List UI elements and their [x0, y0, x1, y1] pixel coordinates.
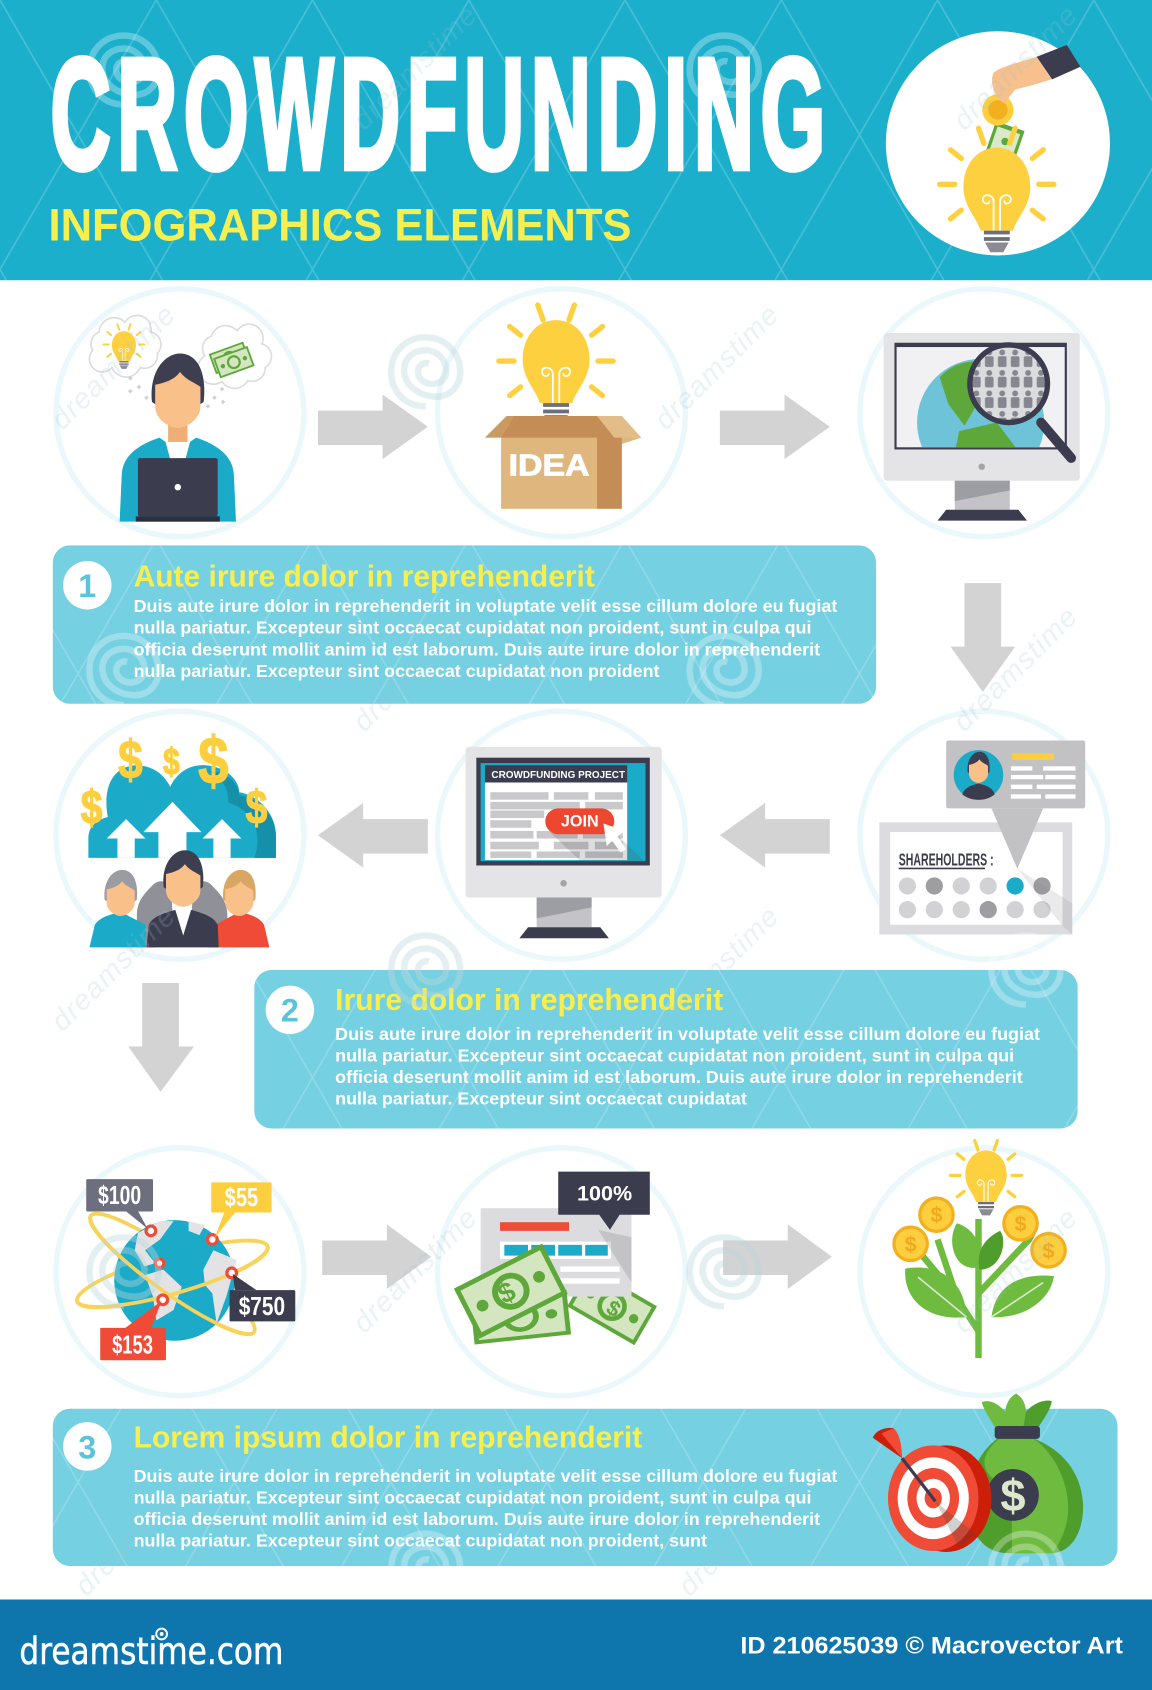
- panel: step 2: [254, 970, 1078, 1128]
- heading 2: Irure dolor in reprehenderit: [335, 984, 723, 1017]
- panel: step 1: [53, 545, 876, 704]
- panel: step 3: [53, 1409, 1118, 1566]
- icon: money plant with bulb: [894, 1141, 1065, 1358]
- icon: globe with price tags: $100: [98, 1182, 141, 1210]
- body text 3: nulla pariatur. Excepteur sint occaecat cupidatat non proident, sunt: [134, 1531, 707, 1551]
- arrow: [720, 394, 830, 459]
- body text 2: officia deserunt mollit anim id est laborum. Duis aute irure dolor in reprehenderit: [335, 1067, 1023, 1087]
- body text 2: Duis aute irure dolor in reprehenderit in voluptate velit esse cillum dolore eu fugiat: [335, 1024, 1040, 1044]
- number badge 1: [63, 561, 112, 609]
- icon: monitor with project page: JOIN: [561, 813, 599, 831]
- icon: money bag and target: $: [1000, 1470, 1026, 1521]
- watermarks: dreamstime: [45, 900, 182, 1037]
- watermarks: dreamstime: [947, 1202, 1084, 1339]
- circle: plant step: [860, 1148, 1108, 1396]
- header icon: hand dropping coin into bulb: [886, 31, 1110, 255]
- body text 2: nulla pariatur. Excepteur sint occaecat cupidatat non proident, sunt in culpa qui: [335, 1046, 1014, 1066]
- icon: investors under clouds: $: [246, 782, 267, 834]
- arrow: [720, 803, 830, 868]
- circle: investors step: [56, 711, 304, 959]
- circle: idea step: [438, 289, 685, 537]
- circle: monitor step: [860, 289, 1108, 537]
- body text 3: [134, 1466, 837, 1551]
- number badge 3: [63, 1422, 112, 1471]
- watermarks: dreamstime: [347, 600, 484, 738]
- circle: shareholders step: [860, 711, 1108, 959]
- icon: investors under clouds: $: [198, 723, 229, 798]
- body text 3: officia deserunt mollit anim id est laborum. Duis aute irure dolor in reprehenderit: [134, 1509, 820, 1529]
- header band: [0, 0, 1152, 280]
- icon: idea box with bulb: IDEA: [509, 449, 589, 482]
- icon: person with laptop: [89, 315, 272, 522]
- footer logo: dreamstime.com: [19, 1629, 283, 1673]
- icon: funded project with bank notes: $: [493, 1275, 521, 1310]
- body text 1: [134, 596, 837, 681]
- circle: project step: [438, 711, 685, 959]
- number badge 2: 2: [281, 993, 299, 1029]
- arrow: [318, 394, 428, 459]
- number badge 3: 3: [78, 1429, 96, 1465]
- icon: money plant with bulb: $: [930, 1202, 942, 1227]
- body text 2: [335, 1024, 1040, 1109]
- icon: investors under clouds: $: [163, 742, 180, 783]
- icon: money plant with bulb: $: [1043, 1238, 1055, 1263]
- footer credit: ID 210625039 © Macrovector Art: [740, 1633, 1123, 1659]
- watermarks: dreamstime: [648, 900, 786, 1037]
- icon: funded project with bank notes: 100%: [577, 1181, 632, 1206]
- icon: funded project with bank notes: [454, 1172, 657, 1345]
- icon: shareholders board with speech card: [879, 740, 1085, 934]
- icon: investors under clouds: $: [118, 730, 143, 790]
- circle: globe step: [56, 1148, 304, 1396]
- icon: money plant with bulb: $: [1015, 1211, 1027, 1236]
- arrow: [950, 583, 1015, 692]
- icon: monitor with project page: CROWDFUNDING PROJECT: [491, 770, 626, 781]
- watermarks: dreamstime: [947, 600, 1084, 738]
- footer band: [0, 1599, 1152, 1690]
- arrow: [723, 1224, 832, 1289]
- icon: shareholders board with speech card: SHAREHOLDERS :: [899, 849, 994, 869]
- arrow: [128, 983, 194, 1092]
- circle: money step: [438, 1148, 685, 1396]
- number badge 1: 1: [78, 568, 96, 604]
- watermarks: dreamstime: [69, 1465, 206, 1602]
- watermarks: dreamstime: [347, 1202, 484, 1339]
- icon: money plant with bulb: $: [905, 1231, 917, 1256]
- subtitle: INFOGRAPHICS ELEMENTS: [48, 199, 631, 250]
- icon: monitor with project page: [466, 747, 662, 938]
- body text 3: Duis aute irure dolor in reprehenderit in voluptate velit esse cillum dolore eu fugiat: [134, 1466, 837, 1486]
- icon: monitor with globe and magnifier: [884, 333, 1080, 521]
- icon: money bag and target: [873, 1394, 1083, 1553]
- body text 2: nulla pariatur. Excepteur sint occaecat cupidatat: [335, 1089, 747, 1109]
- watermarks: dreamstime: [947, 0, 1084, 136]
- icon: investors under clouds: $: [81, 782, 102, 834]
- watermarks: dreamstime: [672, 1465, 810, 1602]
- icon: investors under clouds: [81, 723, 276, 947]
- body text 1: officia deserunt mollit anim id est laborum. Duis aute irure dolor in reprehenderit: [134, 639, 820, 659]
- icon: globe with price tags: $750: [239, 1293, 285, 1321]
- arrow: [322, 1224, 431, 1289]
- heading 1: Aute irure dolor in reprehenderit: [134, 560, 595, 593]
- body text 1: Duis aute irure dolor in reprehenderit in voluptate velit esse cillum dolore eu fugiat: [134, 596, 837, 616]
- body text 1: nulla pariatur. Excepteur sint occaecat cupidatat non proident, sunt in culpa qui: [134, 618, 811, 638]
- icon: idea box with bulb: [485, 305, 641, 509]
- icon: globe with price tags: [72, 1179, 295, 1360]
- icon: globe with price tags: $55: [225, 1184, 258, 1212]
- number badge 2: [266, 986, 314, 1034]
- arrow: [318, 803, 428, 868]
- icon: funded project with bank notes: $: [602, 1295, 625, 1322]
- heading 3: Lorem ipsum dolor in reprehenderit: [134, 1421, 642, 1454]
- watermarks: dreamstime: [347, 0, 484, 136]
- watermarks: dreamstime: [648, 298, 786, 436]
- watermarks: dreamstime: [45, 298, 182, 436]
- circle: person step: [56, 289, 304, 537]
- icon: globe with price tags: $153: [112, 1332, 153, 1360]
- body text 3: nulla pariatur. Excepteur sint occaecat cupidatat non proident, sunt in culpa qui: [134, 1488, 811, 1508]
- body text 1: nulla pariatur. Excepteur sint occaecat cupidatat non proident: [134, 661, 660, 681]
